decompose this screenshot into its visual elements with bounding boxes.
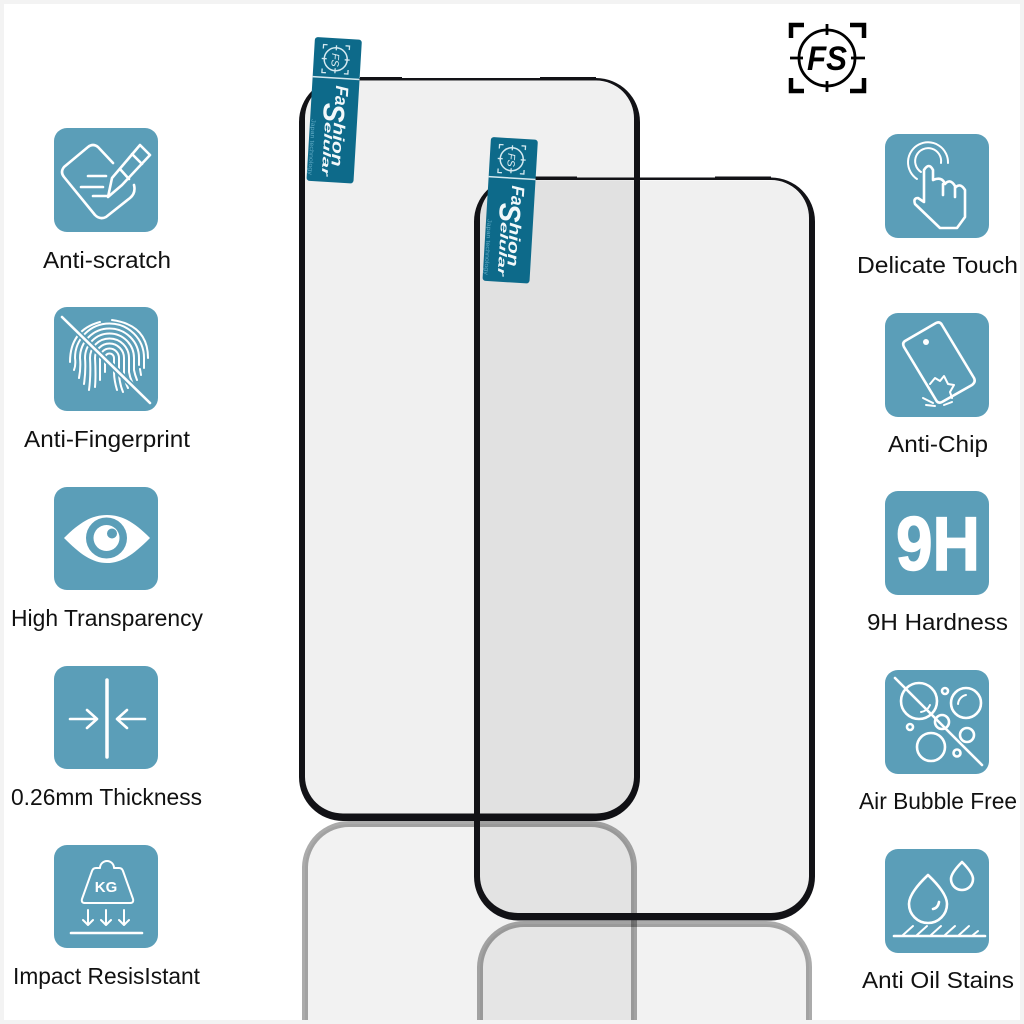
pull tab sticker on left glass: Fa xyxy=(331,85,352,106)
feature: 9H hardness: 9H xyxy=(896,502,980,587)
feature: anti-fingerprint xyxy=(24,307,191,452)
feature: impact resistant: KG xyxy=(95,879,117,896)
pull tab sticker on right glass: hion xyxy=(503,222,523,267)
pull tab sticker on left glass: S xyxy=(316,102,350,123)
pull tab sticker on left glass: hion xyxy=(327,122,347,167)
reflection of left glass xyxy=(305,824,634,1024)
pull tab sticker on right glass: S xyxy=(492,202,526,223)
feature: delicate touch: Delicate Touch xyxy=(857,252,1018,278)
pull tab sticker on left glass: Japan technology xyxy=(306,119,316,175)
right screen protector xyxy=(474,176,815,920)
feature: impact resistant: Impact ResisIstant xyxy=(13,963,201,989)
pull tab sticker on right glass: Japan technology xyxy=(482,219,492,275)
feature: anti-fingerprint: Anti-Fingerprint xyxy=(24,426,191,452)
feature: 9H hardness: 9H Hardness xyxy=(867,609,1008,635)
pull tab sticker on right glass: elular xyxy=(495,222,510,277)
FS brand logo xyxy=(790,24,865,92)
feature: high transparency: High Transparency xyxy=(11,605,203,631)
FS brand logo: FS xyxy=(807,40,847,78)
pull tab sticker on left glass: elular xyxy=(319,122,334,177)
feature: anti-scratch: Anti-scratch xyxy=(43,247,171,273)
feature: anti oil stains: Anti Oil Stains xyxy=(862,967,1014,993)
feature: delicate touch xyxy=(857,134,1018,278)
pull tab sticker on left glass: FS xyxy=(328,53,341,67)
feature: anti oil stains xyxy=(862,849,1014,993)
feature: 0.26mm thickness xyxy=(11,666,202,810)
pull tab sticker on right glass: FS xyxy=(504,153,517,167)
feature: anti-chip: Anti-Chip xyxy=(888,431,988,457)
feature: anti-scratch xyxy=(43,128,171,273)
reflection of right glass xyxy=(480,924,809,1024)
feature: high transparency xyxy=(11,487,203,631)
feature: anti-chip xyxy=(885,313,989,457)
feature: 0.26mm thickness: 0.26mm Thickness xyxy=(11,784,202,810)
feature: 9H hardness xyxy=(867,491,1008,635)
feature: air bubble free: Air Bubble Free xyxy=(859,788,1017,814)
feature: impact resistant xyxy=(13,845,201,989)
left screen protector xyxy=(299,77,640,821)
pull tab sticker on left glass xyxy=(306,37,362,184)
pull tab sticker on right glass xyxy=(482,137,538,284)
pull tab sticker on right glass: Fa xyxy=(507,185,528,206)
feature: air bubble free xyxy=(859,670,1017,814)
